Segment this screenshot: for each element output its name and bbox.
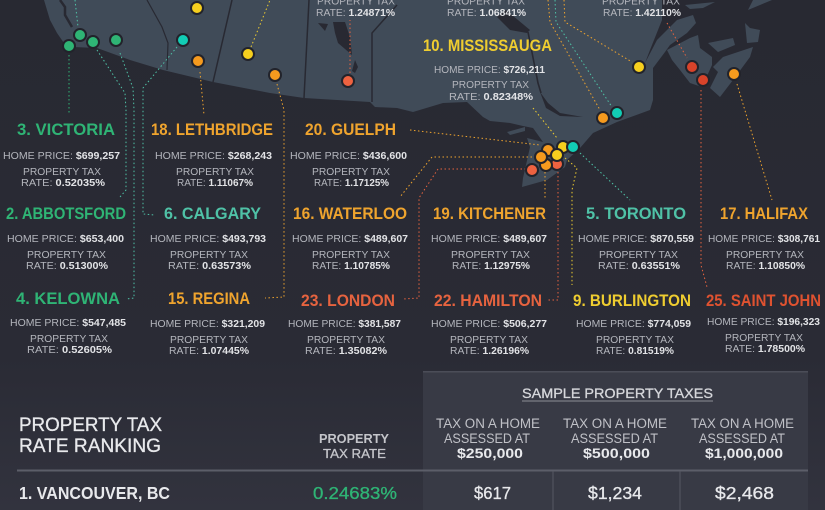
dotted leader lines [69,0,772,300]
column header: $250,000: $250,000 [457,445,523,461]
city: Calgary [150,205,266,272]
column header: $500,000: TAX ON A HOME [563,416,667,431]
city: Burlington [573,292,691,357]
table row: Vancouver: 0.24683% [313,483,397,503]
city: Waterloo: 16. WATERLOO [293,205,407,223]
city: Mississauga: HOME PRICE: $726,211 [434,65,545,76]
partial city text top: 1.24871%: RATE: 1.24871% [316,8,395,19]
city: Mississauga [423,37,552,103]
city: Victoria [3,121,120,189]
column header: $500,000: ASSESSED AT [571,431,658,446]
city: Guelph: 20. GUELPH [305,121,396,139]
city: Regina: PROPERTY TAX [170,335,248,346]
city: Halifax: 17. HALIFAX [720,205,808,223]
city: Mississauga: PROPERTY TAX [452,80,529,91]
column header: $250,000: ASSESSED AT [444,431,530,446]
column header: $1,000,000: TAX ON A HOME [691,416,794,431]
table row: Vancouver: $2,468 [715,483,774,503]
table row: Vancouver: $617 [474,483,511,503]
James Bay [497,10,530,33]
city: Toronto [578,205,694,272]
city: London: PROPERTY TAX [307,335,385,346]
city: Burlington: PROPERTY TAX [596,335,674,346]
city: Burlington: HOME PRICE: $774,059 [576,319,691,330]
city: Regina [150,290,265,357]
city: Victoria: 3. VICTORIA [17,121,115,139]
partial city text top: 1.06841%: RATE: 1.06841% [447,8,526,19]
city: Kelowna: 4. KELOWNA [16,290,120,308]
heading: property tax rate ranking: RATE RANKING [19,436,161,457]
city: London: RATE: 1.35082% [305,346,387,357]
partial city text top: 1.42110% [602,0,681,19]
city: Kitchener: RATE: 1.12975% [452,261,530,272]
city: Waterloo [292,205,408,272]
city: Kelowna: PROPERTY TAX [30,334,108,345]
city: Regina: HOME PRICE: $321,209 [150,319,265,330]
city: Hamilton: HOME PRICE: $506,277 [431,319,547,330]
city: Victoria: PROPERTY TAX [23,167,101,178]
column header: property tax rate: PROPERTY [319,431,389,446]
city: Calgary: HOME PRICE: $493,793 [150,234,266,245]
city: Burlington: 9. BURLINGTON [573,292,691,310]
city: London: HOME PRICE: $381,587 [288,319,401,330]
city: Abbotsford: PROPERTY TAX [27,250,106,261]
city: Saint John: PROPERTY TAX [725,333,803,344]
city: Regina: 15. REGINA [168,290,250,308]
column header: property tax rate: TAX RATE [323,446,386,461]
city: Kitchener: 19. KITCHENER [433,205,546,223]
city: Lethbridge: 18. LETHBRIDGE [151,121,273,139]
heading: property tax rate ranking: PROPERTY TAX [19,415,162,436]
city: Hamilton: 22. HAMILTON [434,292,542,310]
city: Waterloo: RATE: 1.10785% [312,261,390,272]
city: Kelowna: RATE: 0.52605% [27,345,112,356]
city: Toronto: PROPERTY TAX [599,250,678,261]
column header: $500,000: $500,000 [583,445,650,461]
heading: property tax rate ranking [19,415,162,457]
city: Calgary: 6. CALGARY [164,205,261,223]
city: Kitchener [431,205,547,272]
city: Guelph: HOME PRICE: $436,600 [290,151,407,162]
city: Kelowna: HOME PRICE: $547,485 [10,318,126,329]
city: Kitchener: PROPERTY TAX [451,250,530,261]
city: Saint John: HOME PRICE: $196,323 [707,317,820,328]
city: Mississauga: 10. MISSISSAUGA [423,37,552,55]
city: Burlington: RATE: 0.81519% [596,346,674,357]
city: Lethbridge: RATE: 1.11067% [177,178,253,189]
column header: $250,000: TAX ON A HOME [436,416,540,431]
column header: $1,000,000: $1,000,000 [705,445,783,461]
panel: sample property taxes background [423,371,808,510]
column header: $1,000,000: ASSESSED AT [699,431,785,446]
city: Hamilton [431,292,547,357]
table row: Vancouver: 1. VANCOUVER, BC [19,483,170,503]
city: Saint John: RATE: 1.78500% [725,344,805,355]
city: Kelowna [10,290,126,356]
map of Canada [44,0,772,187]
city: Kitchener: HOME PRICE: $489,607 [431,234,547,245]
city: Halifax: RATE: 1.10850% [726,261,805,272]
city: Victoria: HOME PRICE: $699,257 [3,151,120,162]
city: Abbotsford: RATE: 0.51300% [26,261,108,272]
city: Hamilton: PROPERTY TAX [450,335,528,346]
city: London [288,292,401,357]
city: Toronto: RATE: 0.63551% [598,261,680,272]
city: Saint John [706,292,821,355]
city: Lethbridge: PROPERTY TAX [176,167,254,178]
table row: Vancouver [19,483,774,503]
city: Toronto: 5. TORONTO [586,205,686,223]
city: Halifax: HOME PRICE: $308,761 [708,234,820,245]
city: Mississauga: RATE: 0.82348% [449,92,533,103]
table row: Vancouver: $1,234 [588,483,642,503]
column header: property tax rate [319,431,389,461]
partial city text top: 1.24871% [316,0,395,19]
table rule and column dividers [17,470,808,510]
heading: sample property taxes: SAMPLE PROPERTY TAXES [522,385,713,401]
column header: $1,000,000 [691,416,794,461]
city: Lethbridge: HOME PRICE: $268,243 [155,151,272,162]
column header: $500,000 [563,416,667,461]
city: Lethbridge [151,121,273,189]
city: Calgary: PROPERTY TAX [170,250,248,261]
city: Victoria: RATE: 0.52035% [21,178,105,189]
city: Regina: RATE: 1.07445% [169,346,249,357]
city: Abbotsford: HOME PRICE: $653,400 [7,234,124,245]
city: London: 23. LONDON [301,292,395,310]
city: Waterloo: HOME PRICE: $489,607 [292,234,408,245]
city: Toronto: HOME PRICE: $870,559 [578,234,694,245]
city markers [63,2,740,176]
city: Guelph: PROPERTY TAX [312,167,390,178]
city: Guelph: RATE: 1.17125% [314,178,389,189]
column header: $250,000 [436,416,540,461]
partial city text top: 1.06841% [447,0,526,19]
city: Abbotsford [6,205,126,272]
city: Halifax [708,205,820,272]
city: Halifax: PROPERTY TAX [726,250,804,261]
city: Waterloo: PROPERTY TAX [312,250,390,261]
partial city text top: 1.42110%: RATE: 1.42110% [603,8,681,19]
city: Calgary: RATE: 0.63573% [168,261,251,272]
city: Hamilton: RATE: 1.26196% [450,346,529,357]
city: Guelph [290,121,407,189]
city: Abbotsford: 2. ABBOTSFORD [6,205,126,223]
